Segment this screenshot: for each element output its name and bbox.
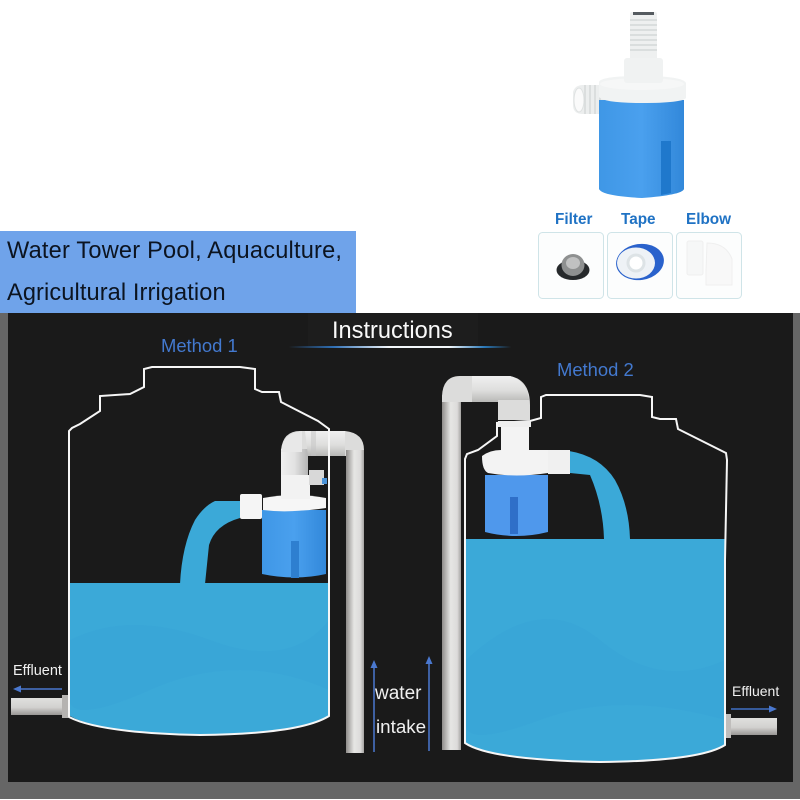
label: Tape: Tape xyxy=(621,211,656,228)
card: filter xyxy=(538,232,604,298)
tank 1 outline xyxy=(69,367,329,735)
label: effluent left: Effluent xyxy=(13,663,62,679)
dark instructions panel xyxy=(8,313,793,782)
heading: Method 2: Method 2 xyxy=(557,359,634,380)
title: Instructions xyxy=(289,313,511,348)
banner: applications xyxy=(0,231,356,313)
tank 2 inlet pipe xyxy=(442,376,530,750)
tank 1 inlet pipe xyxy=(281,431,364,753)
banner: applications: Water Tower Pool, Aquaculture, xyxy=(7,238,342,264)
tank 1 valve xyxy=(240,470,327,578)
tank 1 pouring water xyxy=(180,501,240,584)
gray frame xyxy=(0,313,800,799)
label: Elbow: Elbow xyxy=(686,211,731,228)
label: water intake xyxy=(374,683,426,737)
diagram: method 2 tank xyxy=(442,376,779,762)
label: water intake: intake xyxy=(376,716,426,737)
arrow: effluent left xyxy=(13,686,62,692)
tank 2 outlet pipe xyxy=(726,714,777,738)
label: effluent right: Effluent xyxy=(732,683,779,699)
banner: applications: Agricultural Irrigation xyxy=(7,280,226,306)
heading: Method 1: Method 1 xyxy=(161,335,238,356)
tank 2 valve xyxy=(482,421,570,536)
tank 2 water xyxy=(466,539,725,762)
title: Instructions: Instructions xyxy=(332,318,453,344)
tank 2 pouring water xyxy=(569,451,630,539)
card: elbow xyxy=(676,232,742,298)
tank 1 outlet pipe xyxy=(11,695,68,718)
arrow: water intake right xyxy=(426,656,432,751)
tank 1 water xyxy=(69,583,329,735)
diagram: method 1 tank xyxy=(11,367,364,753)
tank 2 outline xyxy=(465,395,727,762)
card: tape xyxy=(608,232,672,298)
arrow: water intake left xyxy=(370,660,378,752)
label: water intake: water xyxy=(374,683,422,704)
label: Filter: Filter xyxy=(555,211,592,228)
icon: float valve product xyxy=(573,12,686,198)
arrow: effluent right xyxy=(731,706,777,712)
